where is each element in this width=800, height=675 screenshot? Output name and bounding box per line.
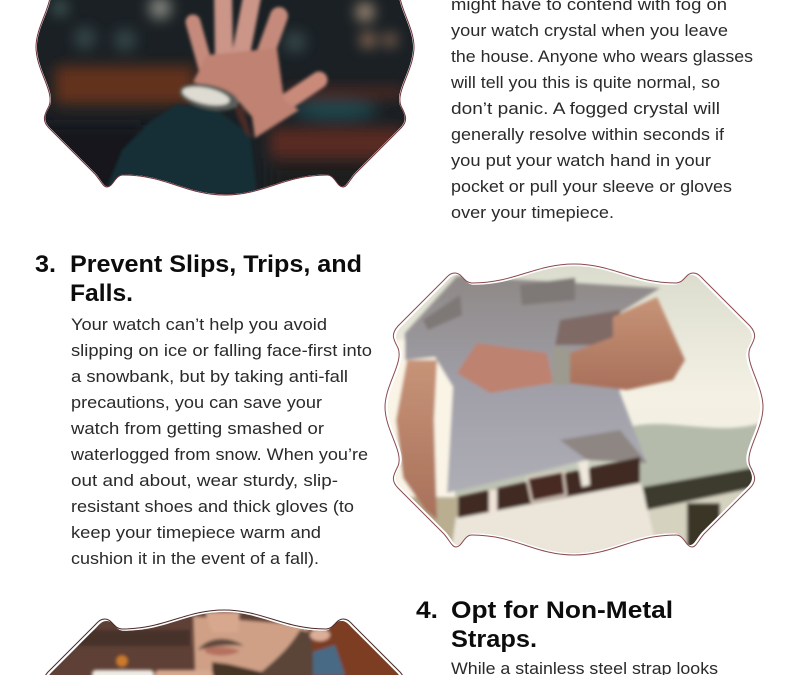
text block: fogged crystal advice: pocket or pull your sleeve or gloves: [451, 178, 732, 196]
text block: anti-fall precautions: watch from getting smashed or: [70, 420, 325, 438]
text block: anti-fall precautions: Your watch can’t help you avoid: [71, 316, 327, 334]
text block: anti-fall precautions: slipping on ice or falling face-first into: [71, 342, 372, 360]
text block: fogged crystal advice: generally resolve within seconds if: [451, 126, 724, 144]
text block: anti-fall precautions: keep your timepiece warm and: [71, 524, 321, 542]
text block: fogged crystal advice: you put your watch hand in your: [451, 152, 712, 170]
text block: fogged crystal advice: don’t panic. A fogged crystal will: [451, 100, 720, 118]
heading: tip 4: 4.: [416, 597, 438, 624]
heading: tip 3: 3.: [35, 251, 56, 278]
heading: tip 3: Falls.: [70, 280, 133, 307]
text block: anti-fall precautions: out and about, wear sturdy, slip-: [71, 472, 338, 490]
photo: bearded man with coffee cup: [45, 610, 403, 675]
text block: anti-fall precautions: [70, 316, 372, 568]
photo: hand with wristwatch: [30, 0, 420, 200]
text block: anti-fall precautions: resistant shoes and thick gloves (to: [71, 498, 354, 516]
heading: tip 3: [35, 251, 362, 307]
heading: tip 4: Opt for Non-Metal: [451, 597, 673, 624]
text block: anti-fall precautions: precautions, you can save your: [71, 394, 323, 412]
text block: anti-fall precautions: waterlogged from snow. When you’re: [70, 446, 368, 464]
text block: anti-fall precautions: a snowbank, but by taking anti-fall: [71, 368, 348, 386]
text block: fogged crystal advice: [450, 0, 753, 222]
text block: anti-fall precautions: cushion it in the event of a fall).: [71, 550, 319, 568]
text block: fogged crystal advice: over your timepiece.: [451, 204, 614, 222]
heading: tip 3: Prevent Slips, Trips, and: [70, 251, 362, 278]
text block: fogged crystal advice: your watch crystal when you leave: [451, 22, 728, 40]
heading: tip 4: [416, 597, 673, 653]
text block: fogged crystal advice: the house. Anyone who wears glasses: [451, 48, 753, 66]
text block: fogged crystal advice: will tell you this is quite normal, so: [450, 74, 720, 92]
heading: tip 4: Straps.: [451, 626, 537, 653]
photo: man checking steel wristwatch: [380, 260, 770, 560]
